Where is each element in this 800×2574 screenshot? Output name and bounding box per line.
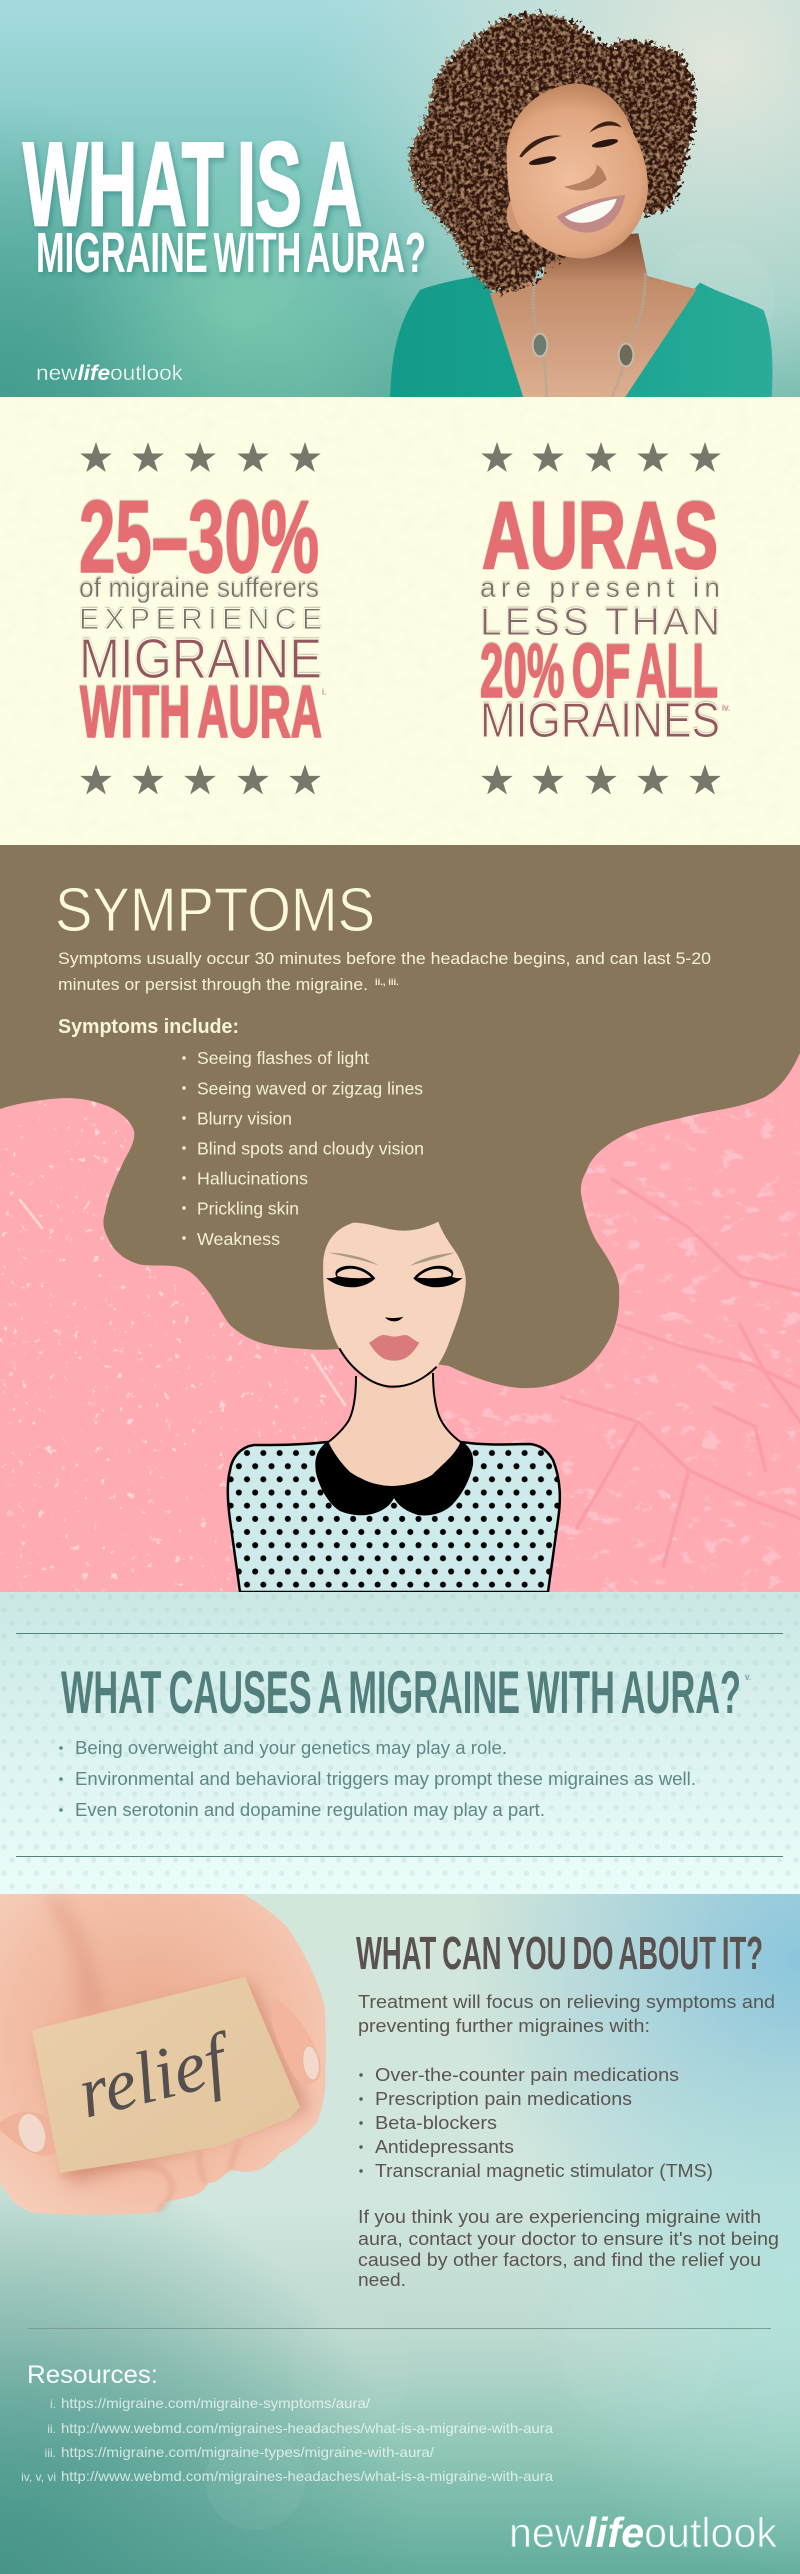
resources list: http://www.webmd.com/migraines-headaches/what-is-a-migraine-with-aura (61, 2420, 553, 2436)
resources list: ii. (47, 2422, 56, 2436)
right finger (272, 1998, 321, 2085)
illustration: flowing hair (0, 845, 800, 1388)
photo: hands holding relief card (0, 1894, 326, 2215)
left eye (326, 1266, 375, 1287)
treatment list: Transcranial magnetic stimulator (TMS) (375, 2160, 713, 2181)
symptoms list: Seeing waved or zigzag lines (197, 1078, 423, 1098)
palm crease shading (45, 1898, 105, 2020)
title: what is a: WHAT IS A (23, 118, 362, 251)
card shadow (40, 1982, 310, 2185)
stat: auras: LESS THAN (480, 601, 720, 644)
symptoms list: Prickling skin (197, 1199, 299, 1219)
stars: left top (80, 442, 321, 472)
closing paragraph: need. (358, 2269, 406, 2290)
closing paragraph: caused by other factors, and find the relief you (358, 2249, 761, 2270)
treatment intro: Treatment will focus on relieving symptoms and (358, 1991, 775, 2012)
stat: 25-30 percent: MIGRAINE (79, 627, 322, 691)
panel: what causes (0, 1592, 800, 1894)
brows (519, 121, 622, 157)
panel: header hero (0, 0, 800, 397)
treatment intro: preventing further migraines with: (358, 2015, 650, 2036)
treatment list (359, 2064, 713, 2181)
stars: right bottom (481, 764, 721, 794)
symptoms intro text: Symptoms usually occur 30 minutes before the headache begins, and can last 5-20 (58, 949, 711, 968)
symptoms list: Blind spots and cloudy vision (197, 1139, 424, 1159)
pink textured background (0, 845, 800, 1592)
reference mark: v. (745, 1672, 751, 1682)
stat: 25-30 percent: EXPERIENCE (79, 603, 322, 636)
necklace (533, 273, 645, 397)
symptoms include label: Symptoms include: (58, 1016, 239, 1038)
logo: newlifeoutlook (36, 361, 183, 385)
paper background (0, 397, 800, 845)
causes list: Environmental and behavioral triggers may prompt these migraines as well. (75, 1769, 696, 1789)
symptoms intro text: minutes or persist through the migraine. (58, 975, 368, 994)
stars: right top (481, 442, 721, 472)
illustration: blouse (228, 1442, 560, 1592)
treatment list: Beta-blockers (375, 2112, 497, 2133)
lower thumb (0, 2112, 59, 2156)
causes background (0, 1592, 800, 1894)
title: migraine with aura: MIGRAINE WITH AURA? (36, 221, 426, 285)
eyes (528, 154, 557, 167)
resources list: https://migraine.com/migraine-symptoms/aura/ (61, 2395, 370, 2411)
ear (507, 198, 525, 232)
symptoms intro text: ii., iii. (375, 977, 399, 988)
causes list (59, 1738, 696, 1820)
treatment intro (358, 1991, 775, 2036)
header background (0, 0, 800, 397)
lower background (0, 1894, 800, 2574)
treatment list: Over-the-counter pain medications (375, 2064, 679, 2085)
lips (557, 195, 625, 233)
photo: smiling woman (390, 13, 773, 397)
resources list: https://migraine.com/migraine-types/migraine-with-aura/ (61, 2444, 434, 2460)
stars: left bottom (80, 764, 321, 794)
stat: auras: are present in (480, 572, 720, 603)
face (507, 83, 648, 258)
closing paragraph (358, 2206, 779, 2290)
shirt (390, 276, 773, 397)
illustration: face (323, 1222, 466, 1387)
lower fingers (60, 2142, 240, 2212)
face shape (323, 1222, 466, 1387)
cardboard card (32, 1977, 300, 2173)
resources list: iii. (45, 2446, 56, 2460)
treatment list: Antidepressants (375, 2136, 514, 2157)
resources list: i. (50, 2397, 56, 2411)
eyebrows (328, 1253, 455, 1266)
symptoms list: Hallucinations (197, 1169, 308, 1189)
heading: symptoms: SYMPTOMS (55, 876, 375, 945)
treatment list: Prescription pain medications (375, 2088, 632, 2109)
closing paragraph: aura, contact your doctor to ensure it's not being (358, 2228, 779, 2249)
logo footer: newlifeoutlook (509, 2509, 778, 2556)
jaw line (339, 1348, 437, 1387)
blouse polka dots (228, 1442, 560, 1592)
pendants (533, 334, 547, 356)
panel: statistics (0, 397, 800, 845)
causes list: Being overweight and your genetics may play a role. (75, 1738, 507, 1758)
hair (409, 13, 696, 292)
nail left (13, 2110, 51, 2156)
illustration: neck (327, 1373, 462, 1490)
teeth (565, 199, 617, 223)
closing paragraph: If you think you are experiencing migraine with (358, 2206, 761, 2227)
resources list: iv, v, vi (21, 2470, 56, 2484)
stat: 25-30 percent (79, 480, 326, 753)
symptoms intro text (58, 949, 711, 994)
causes list: Even serotonin and dopamine regulation may play a part. (75, 1800, 545, 1820)
nail right (301, 2045, 321, 2081)
resources list (21, 2395, 553, 2484)
symptoms list: Weakness (197, 1229, 280, 1249)
lips (369, 1335, 419, 1361)
stat: 25-30 percent: 25–30% (79, 480, 319, 594)
right eye (413, 1266, 463, 1287)
stat: 25-30 percent: WITH AURA (80, 672, 322, 753)
stat: 25-30 percent: i. (322, 687, 326, 697)
stat: auras (480, 483, 730, 748)
panel: what can you do and resources (0, 1894, 800, 2574)
stat: auras: MIGRAINES (480, 694, 720, 748)
nose shadow (564, 165, 607, 191)
heading: resources: Resources: (27, 2361, 158, 2389)
hands (0, 1894, 326, 2215)
stat: 25-30 percent: of migraine sufferers (79, 572, 319, 603)
symptoms list: Blurry vision (197, 1108, 292, 1128)
symptoms list: Seeing flashes of light (197, 1048, 369, 1068)
symptoms list (182, 1048, 424, 1249)
panel: symptoms (0, 845, 800, 1592)
neck and chest (490, 233, 697, 397)
collar (315, 1441, 473, 1515)
nose (385, 1317, 403, 1321)
resources list: http://www.webmd.com/migraines-headaches/what-is-a-migraine-with-aura (61, 2468, 553, 2484)
neck outline (327, 1373, 462, 1443)
handwritten relief: relief (70, 2017, 243, 2134)
stat: auras: iv. (722, 703, 730, 713)
